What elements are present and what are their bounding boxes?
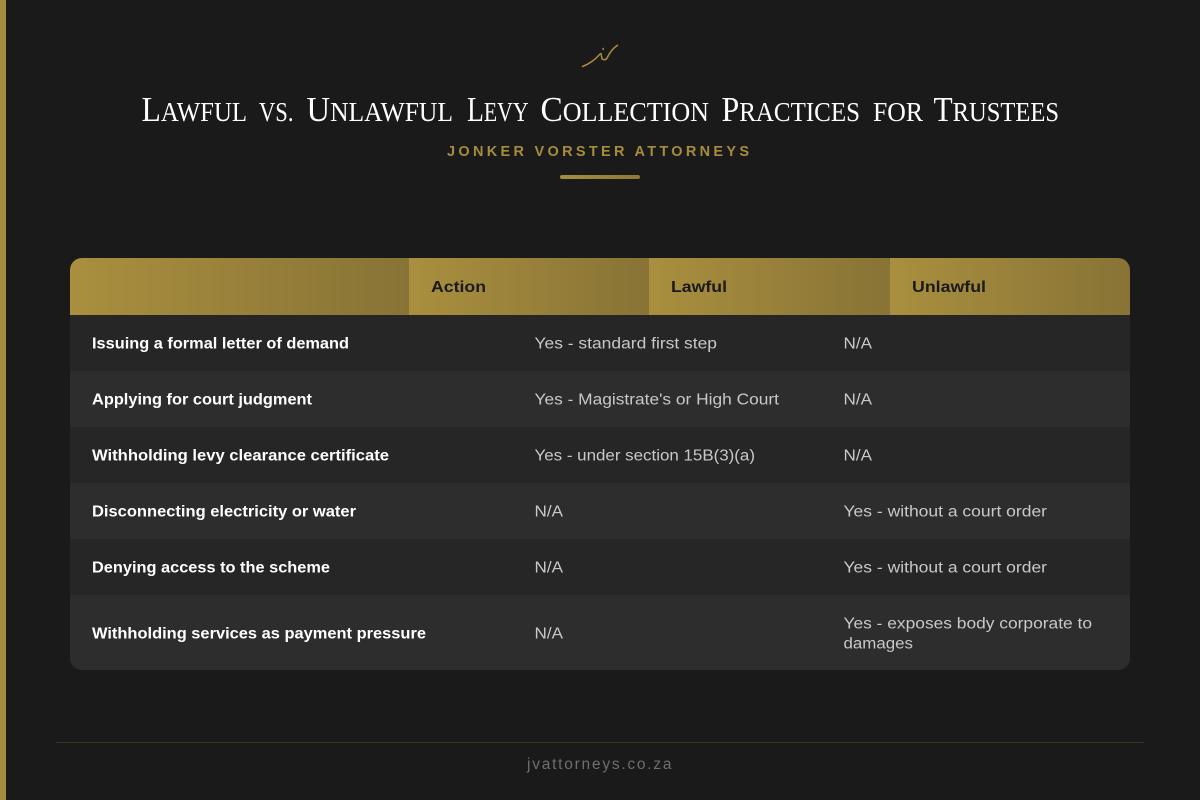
header: Unlawful	[890, 258, 1130, 315]
header: Unlawful: Unlawful	[912, 279, 986, 296]
title: TRUSTEES	[934, 91, 1059, 129]
title: LEVY	[467, 91, 528, 129]
title: LAWFUL	[142, 91, 247, 129]
row 5: denying access: Yes - without a court order	[844, 560, 1047, 576]
row 2: court judgment: Applying for court judgment	[92, 392, 312, 408]
row 6: withholding services: damages	[844, 636, 913, 652]
row 2: court judgment	[70, 371, 1130, 427]
row 5: denying access: Denying access to the scheme	[92, 560, 330, 576]
title underline	[560, 175, 640, 179]
title	[142, 91, 1059, 129]
subtitle: JONKER VORSTER ATTORNEYS	[447, 144, 749, 160]
row 4: disconnecting utilities: Yes - without a court order	[844, 504, 1047, 520]
row 3: clearance certificate: Withholding levy clearance certificate	[92, 448, 389, 464]
row 3: clearance certificate: N/A	[844, 448, 873, 464]
row 5: denying access	[70, 539, 1130, 595]
icon: signature logo	[582, 45, 618, 66]
row 1: letter of demand: Issuing a formal letter of demand	[92, 336, 349, 352]
row 1: letter of demand: Yes - standard first step	[534, 336, 717, 352]
title: VS.	[259, 97, 294, 127]
table header row	[70, 258, 1130, 315]
row 4: disconnecting utilities: N/A	[534, 504, 564, 520]
header: Lawful	[649, 258, 890, 315]
header: Action: Action	[431, 279, 486, 296]
row 6: withholding services: Withholding services as payment pressure	[92, 626, 426, 642]
row 6: withholding services: N/A	[534, 626, 564, 642]
row 3: clearance certificate	[70, 427, 1130, 483]
header: Action	[409, 258, 649, 315]
footer divider	[56, 742, 1144, 743]
row 4: disconnecting utilities: Disconnecting electricity or water	[92, 504, 356, 520]
title: PRACTICES	[722, 91, 860, 129]
row 6: withholding services: Yes - exposes body corporate to	[844, 616, 1092, 632]
header: Lawful: Lawful	[671, 279, 727, 296]
footer url: jvattorneys.co.za	[526, 756, 672, 773]
row 2: court judgment: N/A	[844, 392, 873, 408]
row 2: court judgment: Yes - Magistrate's or High Court	[534, 392, 780, 408]
table	[70, 258, 1130, 670]
row 5: denying access: N/A	[534, 560, 564, 576]
row 1: letter of demand	[70, 315, 1130, 371]
row 4: disconnecting utilities	[70, 483, 1130, 539]
title: UNLAWFUL	[306, 91, 453, 129]
row 1: letter of demand: N/A	[844, 336, 873, 352]
title: COLLECTION	[540, 91, 709, 129]
title: FOR	[873, 97, 923, 127]
left accent bar	[0, 0, 6, 800]
row 6: withholding services	[70, 595, 1130, 670]
row 3: clearance certificate: Yes - under section 15B(3)(a)	[534, 448, 755, 464]
